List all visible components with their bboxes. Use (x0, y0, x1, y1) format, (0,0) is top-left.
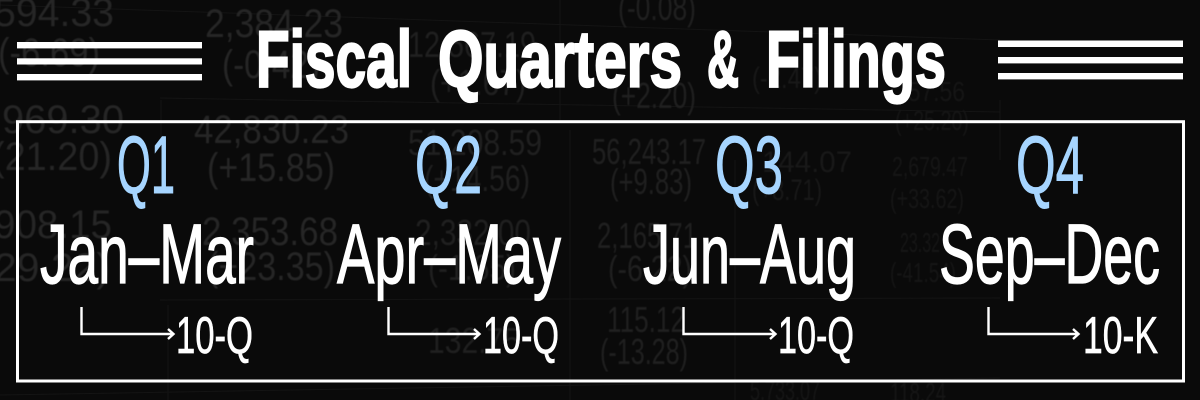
quarter 1 column (40, 120, 254, 365)
background: faint stock ticker numbers: 115.12 (607, 299, 685, 340)
background: faint stock ticker numbers: (+15.85) (207, 146, 335, 190)
background: faint stock ticker numbers: (+23.35) (207, 245, 335, 289)
background: faint stock ticker numbers: 969.30 (2, 98, 124, 142)
background: faint stock ticker numbers: 12,567.19 (408, 24, 536, 65)
background: faint stock ticker numbers: 2,332.00 (415, 212, 531, 253)
title: Fiscal (256, 14, 412, 104)
title: & (707, 14, 739, 104)
background: faint stock ticker numbers: 2,679.47 (892, 151, 968, 182)
title: Filings (766, 14, 946, 104)
background: faint stock ticker numbers: 42,830.23 (194, 108, 349, 152)
background: faint stock ticker numbers: (+8.71) (752, 174, 822, 207)
background: faint stock ticker numbers: 2,165.71 (597, 215, 697, 256)
quarter 2 column (337, 120, 561, 365)
panel: quarters frame (18, 122, 1184, 381)
background: faint stock ticker numbers: 56,243.17 (592, 131, 706, 172)
background: faint stock ticker numbers: 23.32 (900, 227, 940, 258)
right decorative bars (998, 40, 1183, 79)
background: faint stock ticker numbers: (+25.20) (895, 105, 969, 136)
background: faint stock ticker numbers: 257.56 (895, 76, 965, 107)
quarter 1 column: Jan–Mar (40, 207, 254, 301)
background: faint stock ticker numbers: (+2.20) (612, 75, 696, 116)
quarter 1 column: 10-Q (176, 307, 253, 365)
background: faint stock ticker numbers: (+1.67) (430, 62, 526, 103)
title (256, 14, 946, 104)
background: faint stock ticker numbers: (+14.56) (424, 158, 530, 199)
background: faint stock ticker numbers: (-2.47) (752, 62, 822, 95)
quarter 3 column: Q3 (715, 120, 783, 211)
quarter 3 column (643, 120, 856, 365)
background: faint stock ticker numbers: (-13.28) (600, 331, 688, 372)
background: faint stock ticker numbers: (-1.65) (428, 247, 516, 288)
background: faint stock ticker numbers: (-6.69) (0, 31, 100, 75)
background: faint stock ticker numbers: 144.07 (762, 146, 852, 179)
quarter 4 column: 10-K (1083, 307, 1158, 365)
quarter 4 column: Q4 (1016, 120, 1084, 211)
left decorative bars (17, 42, 202, 80)
quarter 2 column: Q2 (415, 120, 482, 211)
background: faint stock ticker numbers: 2,353.68 (202, 210, 338, 254)
quarter 4 column (939, 120, 1160, 365)
background: faint stock ticker numbers: (+9.83) (610, 161, 692, 202)
title: Quarters (438, 14, 682, 104)
background: faint stock ticker numbers: (-6.22) (608, 248, 692, 289)
quarter 2 column: Apr–May (337, 207, 561, 301)
quarter 1 column: Q1 (117, 120, 175, 211)
background: faint stock ticker numbers: 51,208.59 (408, 122, 542, 163)
quarter 3 column: Jun–Aug (643, 207, 856, 301)
background: faint stock ticker numbers: (-41.54) (890, 257, 956, 288)
quarter 3 column: 10-Q (778, 307, 854, 365)
background: faint stock ticker numbers: 2,384.23 (205, 2, 343, 46)
background: faint stock ticker numbers: 132.75 (428, 320, 520, 361)
background: faint stock ticker numbers: (+33.62) (890, 183, 964, 214)
quarter 2 column: 10-Q (483, 307, 559, 365)
background: faint stock ticker numbers: (-0.42) (222, 43, 320, 87)
